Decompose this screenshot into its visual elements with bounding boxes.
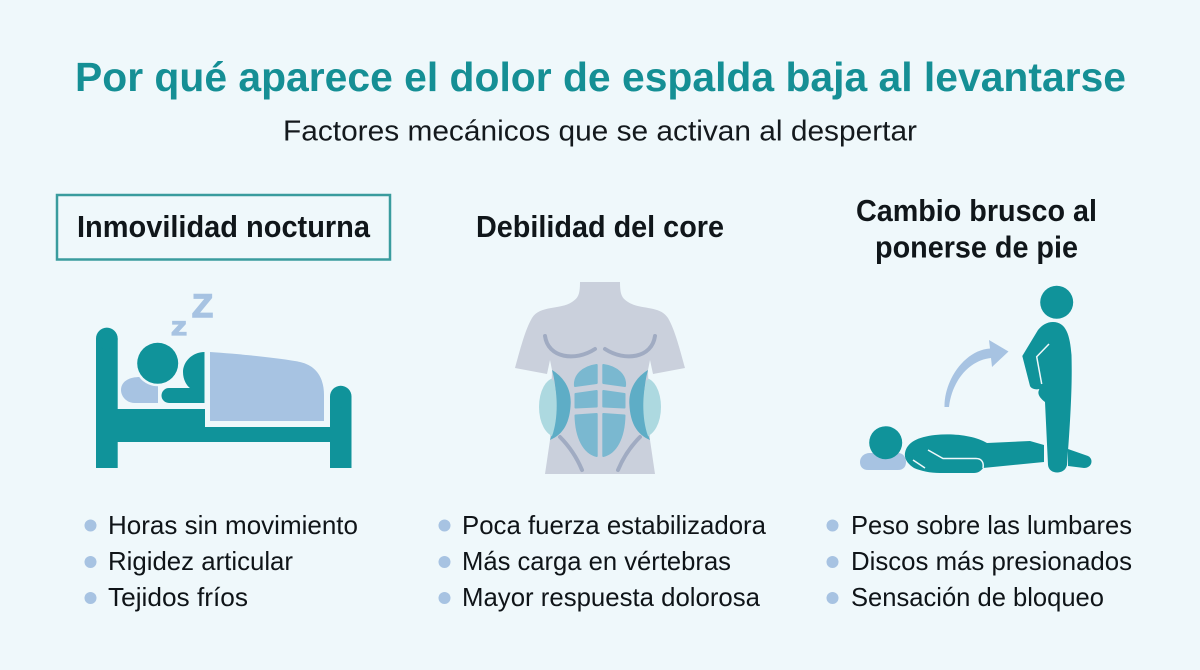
heading: inmovilidad nocturna bbox=[57, 195, 390, 260]
panel: debilidad del core bbox=[438, 209, 767, 612]
list: debilidad del core bbox=[438, 510, 767, 612]
list: cambio brusco: Sensación de bloqueo bbox=[851, 582, 1104, 612]
list: inmovilidad nocturna: Tejidos fríos bbox=[108, 582, 248, 612]
heading: cambio brusco al ponerse de pie bbox=[856, 193, 1097, 264]
list: cambio brusco: Discos más presionados bbox=[851, 546, 1132, 576]
icon: person lying down then standing up bbox=[860, 286, 1091, 473]
heading: cambio brusco al ponerse de pie: ponerse de pie bbox=[875, 230, 1078, 264]
icon: torso with core muscles bbox=[515, 282, 685, 474]
list: debilidad del core: Poca fuerza estabilizadora bbox=[462, 510, 767, 540]
icon: person sleeping in bed bbox=[96, 288, 352, 468]
list: debilidad del core: Más carga en vértebras bbox=[462, 546, 731, 576]
list: cambio brusco: Peso sobre las lumbares bbox=[851, 510, 1132, 540]
list: debilidad del core: Mayor respuesta dolorosa bbox=[462, 582, 761, 612]
icon: person sleeping in bed: Z bbox=[192, 288, 213, 324]
icon: person sleeping in bed: z bbox=[171, 313, 187, 341]
subtitle: Factores mecánicos que se activan al despertar bbox=[283, 116, 917, 148]
panel: cambio brusco al ponerse de pie bbox=[826, 193, 1132, 612]
heading: debilidad del core: Debilidad del core bbox=[476, 209, 724, 244]
title: Por qué aparece el dolor de espalda baja al levantarse bbox=[75, 54, 1126, 100]
list: cambio brusco bbox=[826, 510, 1132, 612]
list: inmovilidad nocturna bbox=[84, 510, 358, 612]
panel: inmovilidad nocturna bbox=[57, 195, 390, 612]
heading: inmovilidad nocturna: Inmovilidad nocturna bbox=[77, 209, 371, 244]
list: inmovilidad nocturna: Horas sin movimiento bbox=[108, 510, 358, 540]
list: inmovilidad nocturna: Rigidez articular bbox=[108, 546, 293, 576]
heading: cambio brusco al ponerse de pie: Cambio brusco al bbox=[856, 193, 1097, 228]
